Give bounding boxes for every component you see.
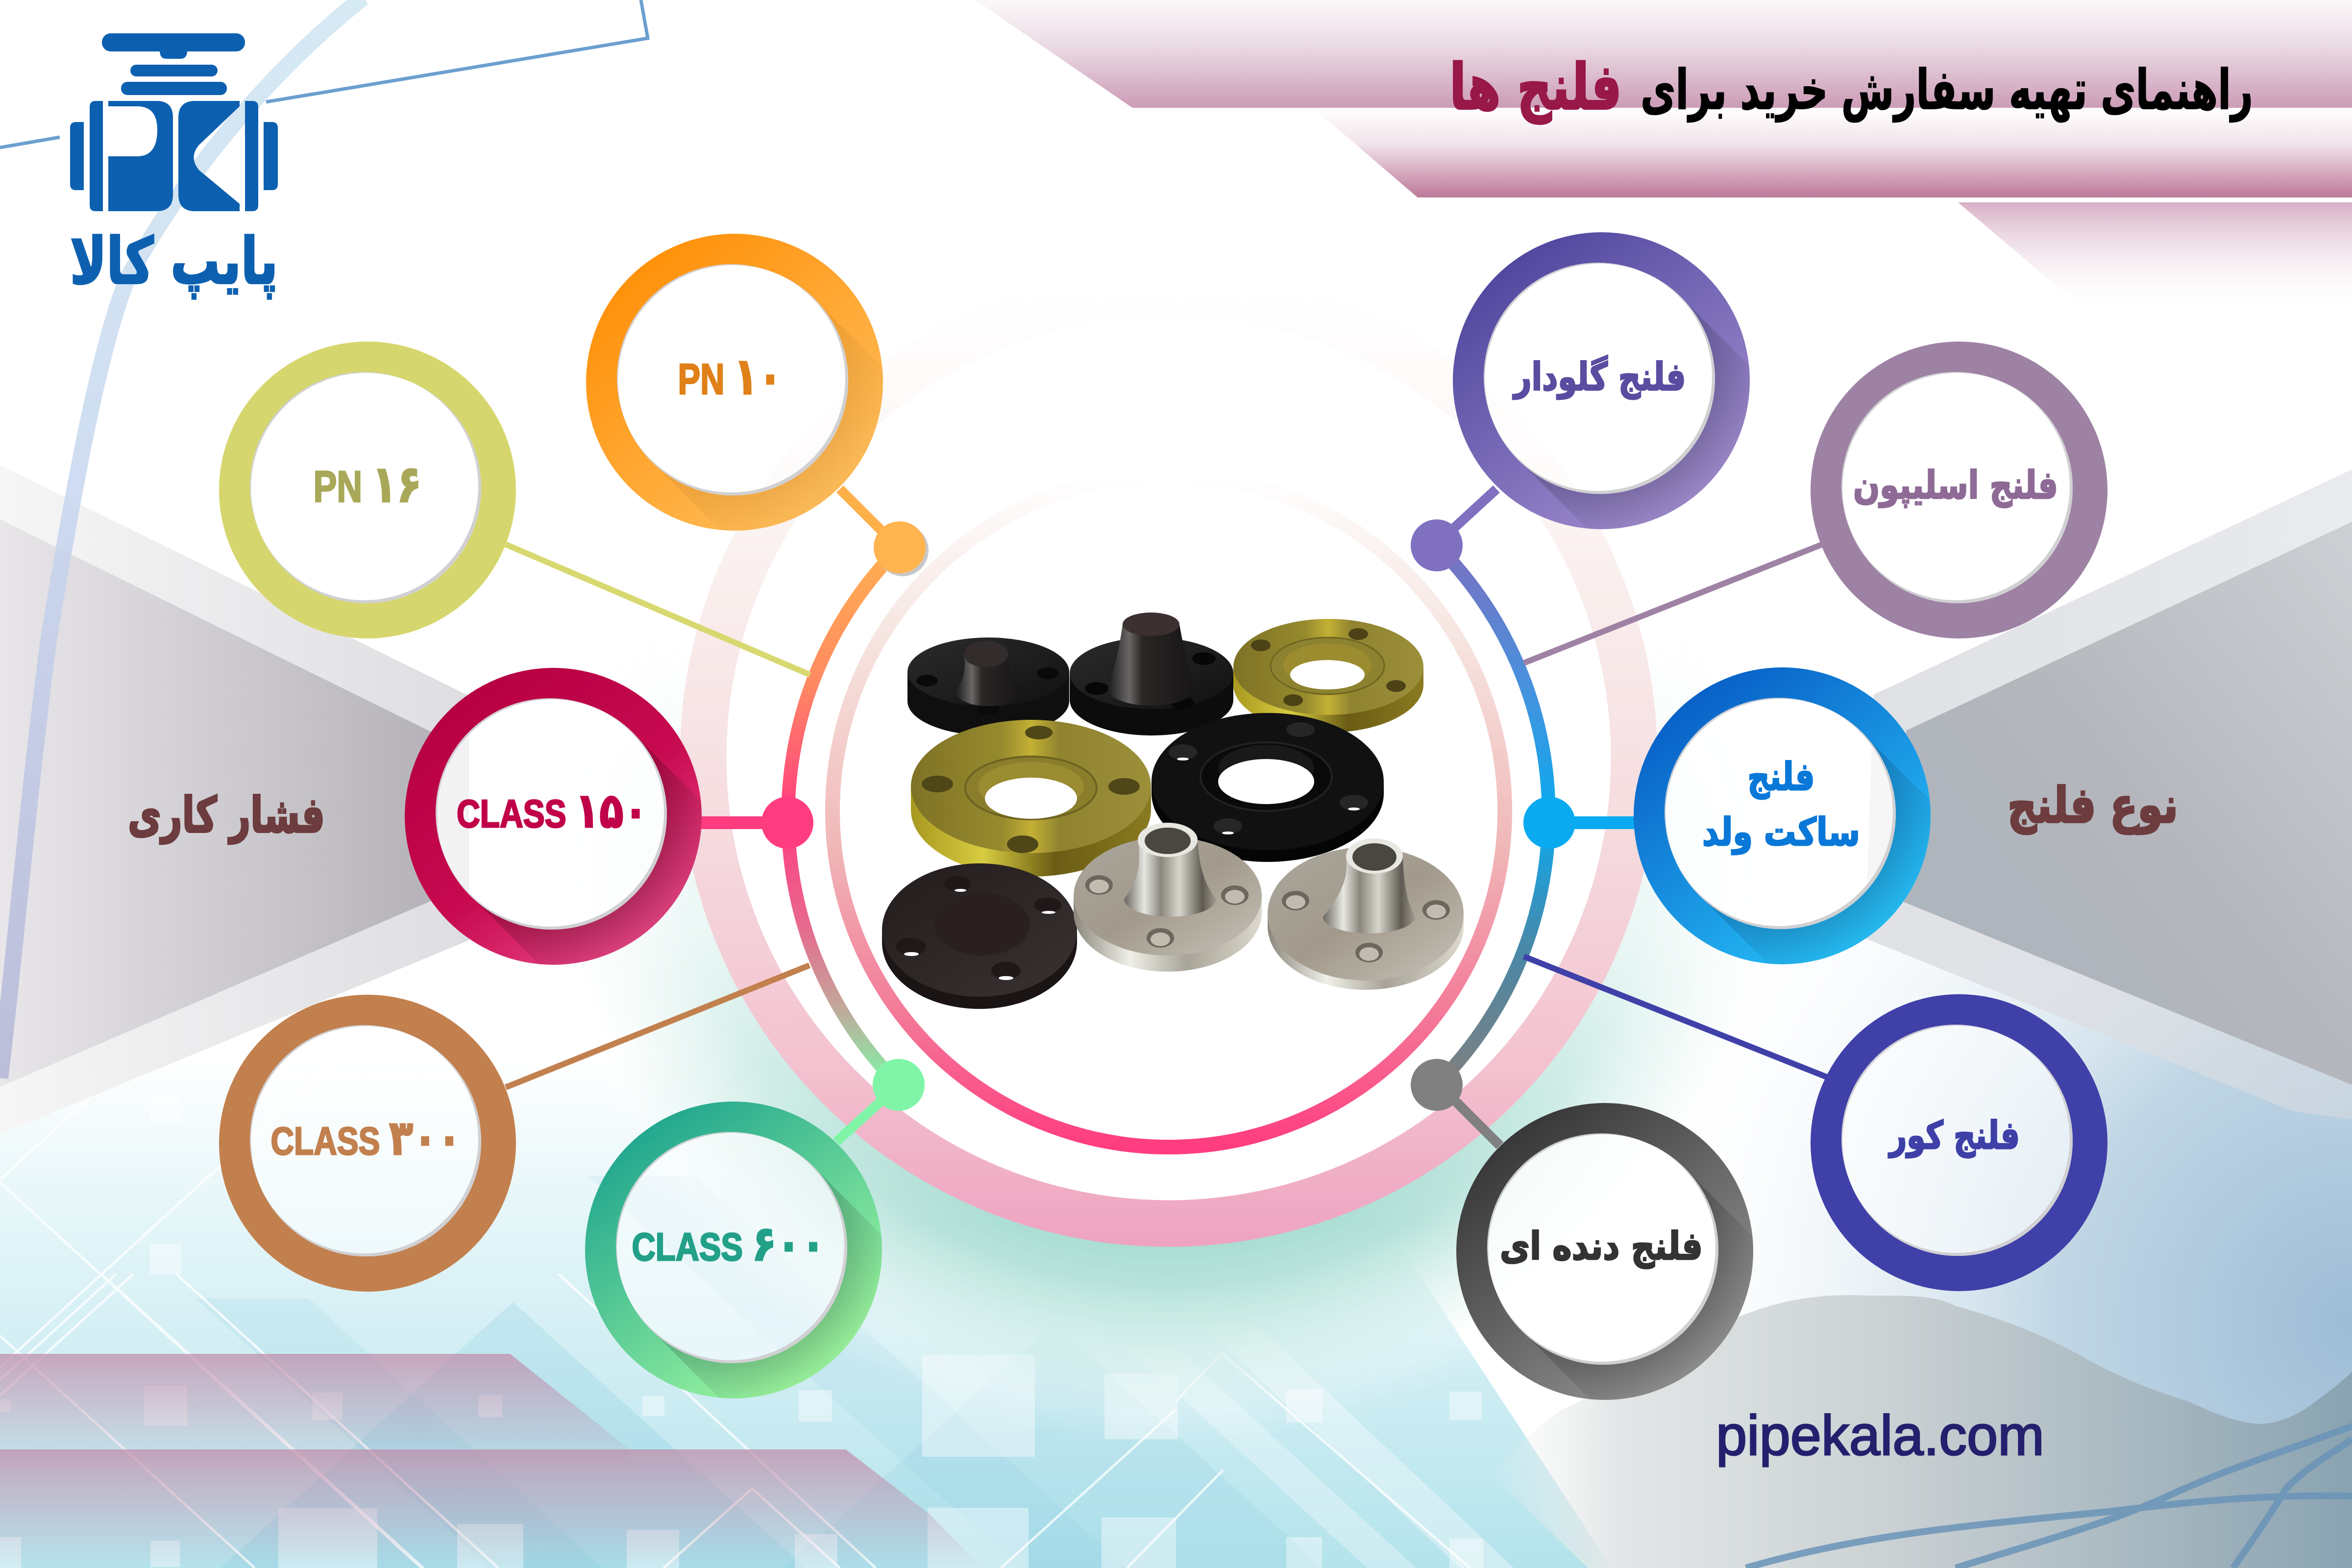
node: CLASS 300: CLASS ۳۰۰ <box>270 1111 462 1165</box>
node: blind flange: فلنج کور <box>1888 1114 2020 1158</box>
flange: large black <box>1152 713 1384 862</box>
left gray shape <box>0 465 469 1134</box>
node: PN 16 <box>219 342 516 638</box>
outer pink band <box>703 293 1634 1224</box>
node: socket weld flange: فلنج <box>1747 755 1815 799</box>
node: threaded flange <box>1456 1103 1823 1470</box>
node: CLASS 600 <box>585 1102 882 1398</box>
bottom pink bands <box>0 1354 982 1568</box>
node: threaded flange: فلنج دنده ای <box>1500 1225 1703 1269</box>
top left decorative arc and line <box>0 0 648 1078</box>
logo wordmark: پایپ کالا <box>70 224 278 299</box>
right coloured arc <box>1437 545 1549 1085</box>
node: blind flange <box>1811 994 2107 1291</box>
connector dots <box>761 519 1575 1111</box>
flange: black weld neck center <box>1070 612 1233 735</box>
node: slip-on flange <box>1811 342 2107 638</box>
right gray shape <box>1865 469 2352 1120</box>
flange: brass top right <box>1233 619 1423 733</box>
heading: working pressure: فشار کاری <box>128 786 325 844</box>
flange: silver weld neck right <box>1268 838 1464 990</box>
title bands <box>975 0 2352 314</box>
node: slip-on flange: فلنج اسلیپون <box>1853 464 2058 508</box>
flanges photo <box>882 612 1464 1009</box>
node: CLASS 150: CLASS ۱۵۰ <box>457 784 648 837</box>
node: grooved flange: فلنج گلودار <box>1512 355 1686 399</box>
flange: silver weld neck center <box>1074 823 1262 972</box>
title <box>1449 51 2253 124</box>
node: CLASS 600: CLASS ۶۰۰ <box>632 1217 825 1271</box>
node: CLASS 150 <box>405 668 702 965</box>
logo <box>70 33 278 299</box>
node: grooved flange <box>1453 232 1820 599</box>
website url: pipekala.com <box>1716 1404 2044 1467</box>
node: CLASS 300 <box>219 995 516 1292</box>
center glow <box>624 868 1713 1421</box>
flange: large brass <box>911 720 1151 877</box>
flange: blind black <box>882 863 1077 1009</box>
node: PN 10 <box>586 234 883 531</box>
flange: black weld neck left <box>907 637 1069 735</box>
bottom right blue area and hill <box>1470 931 2352 1568</box>
node: PN 10: PN ۱۰ <box>678 348 782 405</box>
connector lines <box>506 489 1827 1146</box>
node: PN 16: PN ۱۶ <box>314 456 421 513</box>
heading: flange type: نوع فلنج <box>2008 777 2178 834</box>
inner pink ring <box>833 475 1505 1147</box>
icon: valve logo mark <box>70 33 278 211</box>
left coloured arc <box>788 547 900 1085</box>
node: socket weld flange: ساکت ولد <box>1702 810 1860 855</box>
title: فلنج ها <box>1449 51 1622 124</box>
node: socket weld flange <box>1634 667 2001 1034</box>
